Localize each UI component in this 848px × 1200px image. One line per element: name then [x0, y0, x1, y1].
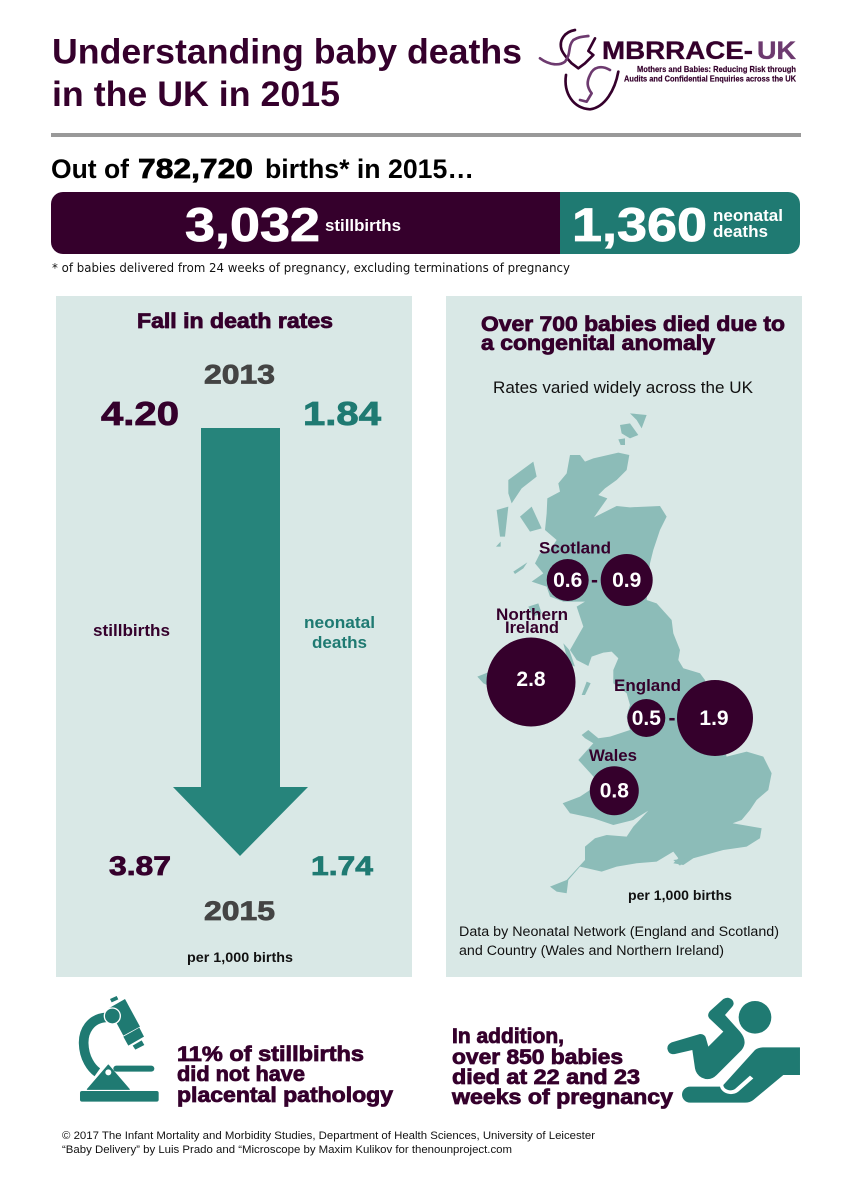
- panel: congenital anomaly: [446, 296, 802, 977]
- footer credits: © 2017 The Infant Mortality and Morbidity Studies, Department of Health Sciences, University of Leicester: [62, 1130, 595, 1142]
- stillbirths label: stillbirths: [93, 622, 170, 640]
- subheading: [51, 153, 474, 184]
- region: Scotland: 0.6: [553, 569, 582, 592]
- callout: 22 and 23 weeks: died at 22 and 23: [452, 1066, 640, 1089]
- icon: baby delivery: [667, 998, 800, 1103]
- panel heading: a congenital anomaly: [481, 332, 715, 355]
- footer credits: “Baby Delivery” by Luis Prado and “Microscope by Maxim Kulikov for thenounproject.com: [62, 1144, 512, 1156]
- data note: and Country (Wales and Northern Ireland): [459, 943, 724, 958]
- stillbirth total: 3,032: [185, 198, 320, 251]
- callout: 22 and 23 weeks: weeks of pregnancy: [451, 1086, 673, 1109]
- unit note: per 1,000 births: [187, 949, 293, 965]
- logo mark: mother and baby: [540, 30, 618, 109]
- callout: placental pathology: did not have: [177, 1063, 305, 1086]
- neonatal deaths label: deaths: [312, 634, 367, 652]
- neonatal deaths label: [304, 614, 375, 652]
- logo strapline: Audits and Confidential Enquiries across the UK: [624, 74, 797, 84]
- region: Wales: 0.8: [600, 780, 629, 802]
- title: Understanding baby deaths: [52, 32, 522, 72]
- year 2015: 2015: [204, 896, 275, 926]
- logo strapline: Mothers and Babies: Reducing Risk through: [637, 64, 796, 74]
- unit note: per 1,000 births: [628, 887, 732, 903]
- region: Northern Ireland: Ireland: [505, 619, 559, 637]
- region: Scotland: -: [591, 569, 598, 592]
- logo: MBRRACE-UK: UK: [757, 37, 796, 65]
- subheading: Out of: [51, 154, 129, 184]
- 2015 neonatal rate: 1.74: [311, 851, 373, 881]
- region: England: -: [668, 707, 676, 730]
- title: [52, 32, 522, 114]
- callout: placental pathology: 11% of stillbirths: [177, 1043, 364, 1066]
- region: England: England: [614, 677, 681, 695]
- region: Northern Ireland: Northern: [496, 606, 568, 624]
- callout: 22 and 23 weeks: In addition,: [452, 1025, 564, 1048]
- panel heading: [481, 313, 785, 355]
- data note: [459, 924, 779, 958]
- callout: 22 and 23 weeks: over 850 babies: [452, 1046, 623, 1069]
- region: Scotland: [539, 540, 653, 606]
- region: Wales: [589, 747, 639, 815]
- 2015 stillbirth rate: 3.87: [109, 851, 171, 881]
- panel: fall in death rates: [56, 296, 412, 977]
- callout: placental pathology: [177, 1043, 393, 1107]
- region: England: 0.5: [632, 707, 661, 730]
- year 2013: 2013: [204, 360, 275, 390]
- panel subheading: Rates varied widely across the UK: [493, 379, 753, 397]
- title: in the UK in 2015: [52, 75, 340, 114]
- logo strapline: [624, 64, 797, 84]
- neonatal total: deaths: [713, 223, 768, 241]
- footnote: * of babies delivered from 24 weeks of pregnancy, excluding terminations of pregnancy: [52, 260, 571, 275]
- stillbirth total: stillbirths: [325, 217, 401, 235]
- region: England: 1.9: [699, 707, 729, 730]
- neonatal deaths label: neonatal: [304, 614, 375, 632]
- headline totals bar: [51, 192, 800, 254]
- neonatal total: [572, 198, 783, 251]
- footer credits: [62, 1130, 595, 1156]
- neonatal total: neonatal: [713, 207, 783, 225]
- stillbirth total: [185, 198, 401, 251]
- region: Scotland: Scotland: [539, 540, 611, 558]
- data note: Data by Neonatal Network (England and Scotland): [459, 924, 779, 939]
- panel heading: Over 700 babies died due to: [481, 313, 785, 336]
- neonatal total: 1,360: [572, 198, 707, 251]
- subheading: 782,720: [138, 153, 253, 184]
- icon: microscope: [80, 996, 159, 1102]
- arrow: down: [173, 428, 308, 856]
- region: England: [614, 677, 753, 756]
- logo: MBRRACE-UK: [540, 30, 797, 109]
- map of the UK: [477, 413, 772, 893]
- region: Scotland: 0.9: [612, 569, 641, 592]
- region: Wales: Wales: [589, 747, 637, 765]
- 2013 neonatal rate: 1.84: [303, 395, 382, 432]
- region: Northern Ireland: [486, 606, 576, 726]
- callout: 22 and 23 weeks: [451, 1025, 673, 1109]
- logo wordmark: MBRRACE-: [602, 37, 753, 65]
- callout: placental pathology: placental pathology: [177, 1084, 393, 1107]
- panel heading: Fall in death rates: [137, 310, 333, 333]
- 2013 stillbirth rate: 4.20: [101, 395, 179, 432]
- region: Northern Ireland: 2.8: [516, 668, 546, 691]
- subheading: births* in 2015…: [265, 154, 474, 184]
